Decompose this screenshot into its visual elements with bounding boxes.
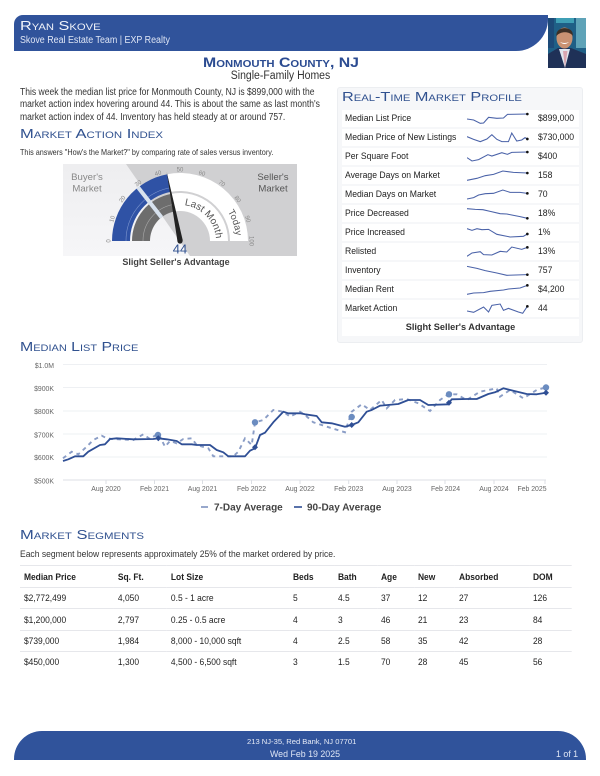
- agent team: Skove Real Estate Team | EXP Realty: [20, 35, 170, 46]
- footer date: Wed Feb 19 2025: [270, 748, 340, 760]
- gauge chart: [63, 164, 297, 256]
- table: market segments: 58: [381, 635, 390, 646]
- gauge chart: 70: [217, 180, 226, 189]
- row: market action: [342, 300, 579, 317]
- table: market segments: 70: [381, 656, 390, 667]
- table: market segments: 23: [459, 614, 468, 625]
- intro paragraph: This week the median list price for Monmouth County, NJ is $899,000 with the: [20, 87, 314, 98]
- line chart: median list price: $500K: [34, 478, 54, 486]
- heading: market action index: Market Action Index: [20, 126, 163, 141]
- gauge chart: Market: [258, 184, 288, 194]
- panel: real-time market profile: [337, 87, 583, 343]
- row: market action: Market Action: [345, 303, 397, 314]
- header banner: [14, 15, 548, 51]
- row: price increased: [342, 224, 579, 241]
- row: relisted: Relisted: [345, 246, 376, 257]
- table: market segments: 2.5: [338, 635, 350, 646]
- row: average days on market: Average Days on Market: [345, 170, 440, 181]
- table: market segments: Lot Size: [171, 571, 203, 582]
- table: market segments: Beds: [293, 571, 314, 582]
- gauge chart: 50: [177, 168, 184, 174]
- gauge chart: 40: [154, 170, 163, 178]
- row: inventory: Inventory: [345, 265, 381, 276]
- table: market segments: 3: [338, 614, 343, 625]
- row: median price of new listings: $730,000: [538, 132, 574, 143]
- line chart: median list price: Aug 2021: [188, 486, 217, 493]
- gauge chart: 80: [233, 195, 242, 205]
- table: market segments: New: [418, 571, 435, 582]
- chart legend: 7-Day Average: [214, 502, 283, 514]
- table: market segments: Bath: [338, 571, 357, 582]
- table: market segments: 42: [459, 635, 468, 646]
- table: market segments: 1,300: [118, 656, 139, 667]
- gauge chart: 20: [119, 195, 128, 204]
- table: market segments: 56: [533, 656, 542, 667]
- table: market segments: 4: [293, 614, 298, 625]
- table: market segments: $2,772,499: [24, 592, 66, 603]
- table: market segments: [20, 565, 572, 667]
- line chart: median list price: Feb 2023: [334, 486, 363, 493]
- gauge chart: 60: [198, 170, 206, 178]
- gauge chart: 10: [109, 215, 117, 223]
- segments description: Each segment below represents approximately 25% of the market ordered by price.: [20, 548, 335, 559]
- row: median rent: $4,200: [538, 284, 564, 295]
- table: market segments: 21: [418, 614, 427, 625]
- gauge chart: Seller's: [257, 172, 289, 183]
- row: price decreased: [342, 205, 579, 222]
- icon: agent photo: [548, 18, 586, 68]
- gauge chart: 30: [134, 179, 144, 188]
- line chart: median list price: $1.0M: [35, 363, 54, 370]
- line chart: median list price: Feb 2024: [431, 486, 460, 493]
- table: market segments: 1,984: [118, 635, 139, 646]
- table: market segments: 1.5: [338, 656, 350, 667]
- row: median list price: $899,000: [538, 113, 574, 124]
- line chart: median list price: Aug 2020: [91, 486, 121, 493]
- table: market segments: Sq. Ft.: [118, 571, 144, 582]
- gauge chart: 100: [247, 236, 253, 247]
- row: median days on market: Median Days on Market: [345, 189, 436, 200]
- table: market segments: Median Price: [24, 571, 76, 582]
- table: market segments: 2,797: [118, 614, 139, 625]
- table: market segments: Absorbed: [459, 571, 498, 582]
- row: median list price: Median List Price: [345, 113, 411, 124]
- chart legend: [201, 502, 382, 514]
- gauge chart: 90: [243, 215, 251, 224]
- table: market segments: Age: [381, 571, 397, 582]
- line chart: median list price: $600K: [34, 455, 54, 462]
- table: market segments: 27: [459, 592, 468, 603]
- row: median rent: Median Rent: [345, 284, 394, 295]
- footer address: 213 NJ-35, Red Bank, NJ 07701: [247, 737, 356, 746]
- table: market segments: 4.5: [338, 592, 350, 603]
- table: market segments: 12: [418, 592, 427, 603]
- row: price increased: Price Increased: [345, 227, 405, 238]
- gauge chart: 0: [107, 239, 113, 243]
- row: median days on market: 70: [538, 189, 548, 200]
- line chart: median list price: Aug 2024: [479, 486, 509, 493]
- gauge description: This answers "How's the Market?" by comparing rate of sales versus inventory.: [20, 148, 273, 157]
- row: inventory: [342, 262, 579, 279]
- subtitle: Single-Family Homes: [231, 70, 330, 82]
- table: market segments: 37: [381, 592, 390, 603]
- gauge chart: Market: [72, 184, 102, 194]
- table: market segments: $450,000: [24, 656, 59, 667]
- table: market segments: 28: [418, 656, 427, 667]
- line chart: median list price: $900K: [34, 386, 54, 393]
- row: median price of new listings: [342, 129, 579, 146]
- line chart: median list price: Feb 2021: [140, 486, 169, 493]
- footer banner: [14, 731, 586, 760]
- row: price decreased: 18%: [538, 208, 555, 219]
- row: relisted: 13%: [538, 246, 555, 257]
- row: median list price: [342, 110, 579, 127]
- row: per square foot: Per Square Foot: [345, 151, 408, 162]
- row: per square foot: [342, 148, 579, 165]
- heading: real-time market profile: Real-Time Market Profile: [342, 89, 522, 104]
- row: median rent: [342, 281, 579, 298]
- gauge chart: Buyer's: [71, 172, 103, 183]
- table: market segments: $1,200,000: [24, 614, 66, 625]
- table: market segments: 4: [293, 635, 298, 646]
- gauge chart: Last Month: [185, 198, 223, 238]
- intro paragraph: market action index hovering around 44. This is about the same as last month's: [20, 99, 320, 110]
- table: market segments: 126: [533, 592, 547, 603]
- profile summary: Slight Seller's Advantage: [406, 322, 515, 332]
- line chart: median list price: $700K: [34, 432, 54, 440]
- row: market action: 44: [538, 303, 548, 314]
- table: market segments: 5: [293, 592, 298, 603]
- table: market segments: $739,000: [24, 635, 59, 646]
- line chart: median list price: Aug 2023: [382, 486, 412, 493]
- intro paragraph: [20, 87, 320, 123]
- intro paragraph: market action index of 44. Inventory has held steady at or around 757.: [20, 112, 285, 123]
- row: price increased: 1%: [538, 227, 550, 238]
- line chart: median list price: $800K: [34, 409, 54, 416]
- row: median price of new listings: Median Price of New Listings: [345, 132, 456, 143]
- line chart: median list price: Aug 2022: [285, 486, 315, 493]
- table: market segments: 4,050: [118, 592, 139, 603]
- table: market segments: 45: [459, 656, 468, 667]
- table: market segments: 3: [293, 656, 298, 667]
- table: market segments: 35: [418, 635, 427, 646]
- table: market segments: 8,000 - 10,000 sqft: [171, 635, 241, 646]
- agent name: Ryan Skove: [20, 18, 101, 33]
- table: market segments: DOM: [533, 571, 553, 582]
- row: average days on market: 158: [538, 170, 552, 181]
- table: market segments: 0.25 - 0.5 acre: [171, 614, 225, 625]
- footer page number: 1 of 1: [556, 748, 578, 760]
- table: market segments: 4,500 - 6,500 sqft: [171, 656, 237, 667]
- table: market segments: 28: [533, 635, 542, 646]
- line chart: median list price: [34, 362, 550, 493]
- row: average days on market: [342, 167, 579, 184]
- chart legend: 90-Day Average: [307, 502, 382, 514]
- line chart: median list price: Feb 2025: [517, 486, 547, 493]
- table: market segments: 84: [533, 614, 542, 625]
- title: Monmouth County, NJ: [203, 54, 359, 70]
- heading: market segments: Market Segments: [20, 527, 144, 542]
- row: inventory: 757: [538, 265, 552, 276]
- heading: median list price: Median List Price: [20, 339, 138, 354]
- row: per square foot: $400: [538, 151, 557, 162]
- gauge chart: Today: [229, 208, 241, 235]
- line chart: median list price: Feb 2022: [237, 486, 266, 493]
- gauge caption: Slight Seller's Advantage: [122, 257, 230, 267]
- table: market segments: 0.5 - 1 acre: [171, 592, 214, 603]
- row: price decreased: Price Decreased: [345, 208, 409, 219]
- row: relisted: [342, 243, 579, 260]
- row: median days on market: [342, 186, 579, 203]
- table: market segments: 46: [381, 614, 390, 625]
- profile summary: [342, 319, 579, 336]
